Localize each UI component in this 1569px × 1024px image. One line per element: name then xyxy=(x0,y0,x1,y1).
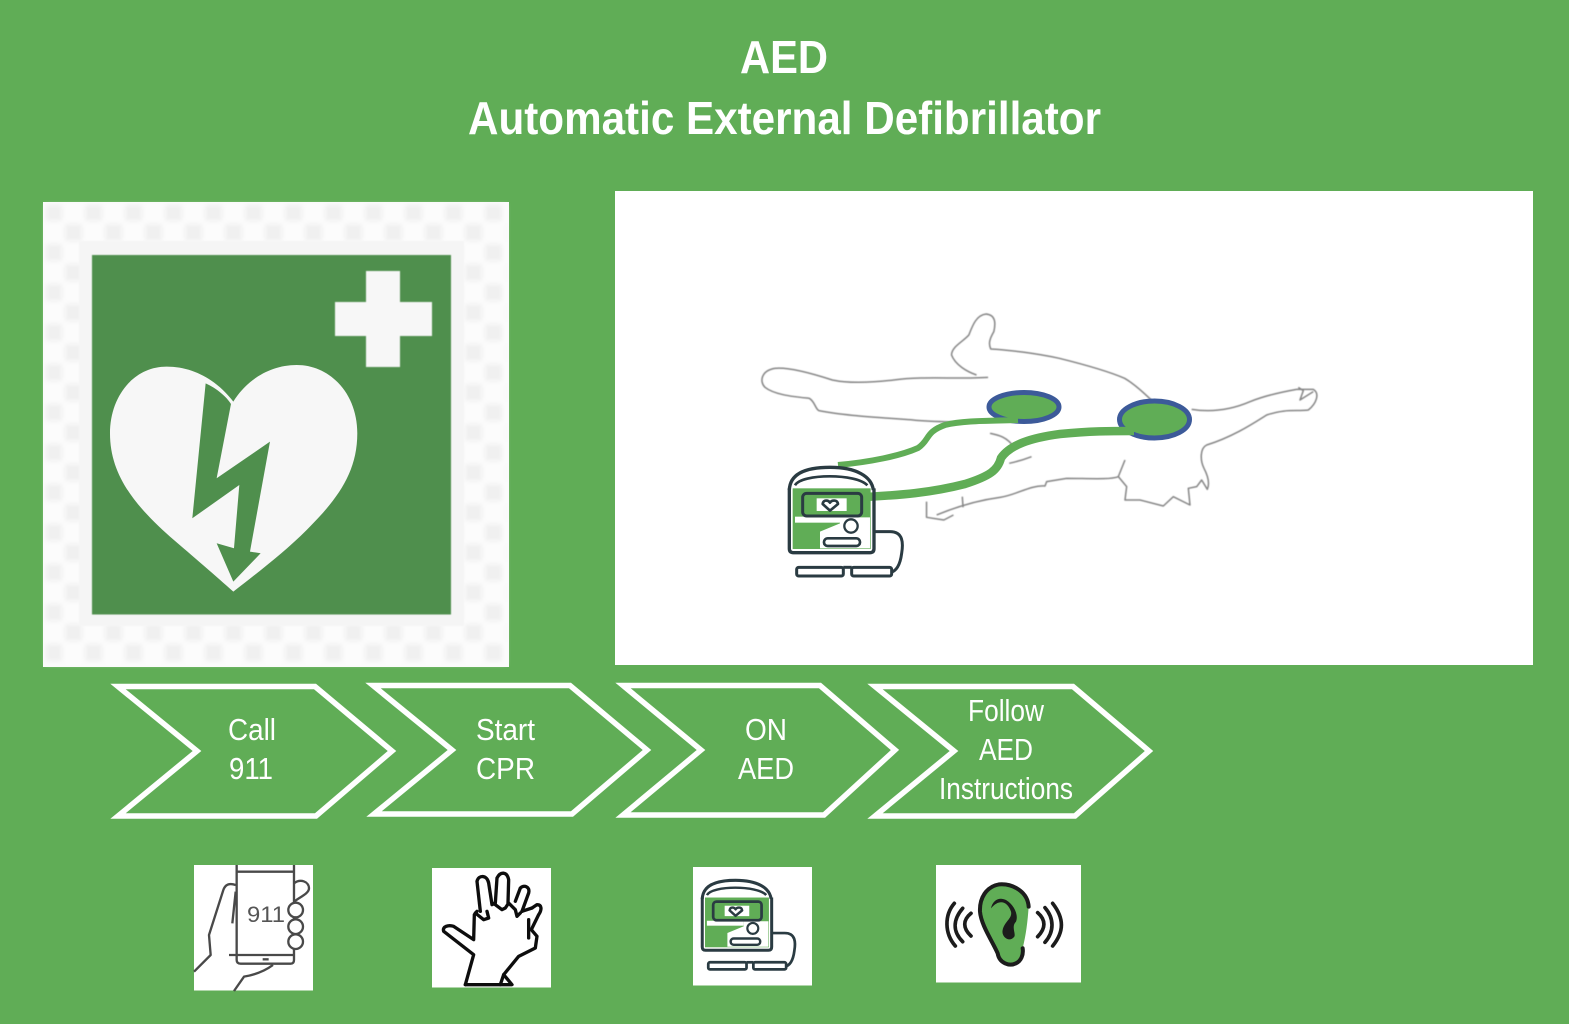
chevron: on AED xyxy=(623,686,895,815)
chevron: call 911: Call xyxy=(228,712,276,747)
cable: upper electrode wire xyxy=(838,420,1018,465)
icon tile: phone calling 911 xyxy=(194,865,313,991)
panel: AED safety sign xyxy=(43,202,509,667)
chevron: follow AED instructions: AED xyxy=(979,732,1033,767)
chevron: start CPR: Start xyxy=(476,712,535,747)
icon: heart with lightning bolt xyxy=(110,365,357,592)
icon tile: CPR hands xyxy=(432,868,551,988)
title: AED xyxy=(740,31,828,83)
chevron: follow AED instructions: Instructions xyxy=(939,771,1073,806)
electrode pad: lower xyxy=(1120,401,1190,438)
phone number text: 911 xyxy=(247,902,285,927)
chevron: follow AED instructions: Follow xyxy=(968,693,1045,728)
chevron: start CPR: CPR xyxy=(476,751,535,786)
body outline xyxy=(762,314,1317,520)
icon: AED device xyxy=(789,467,902,576)
title xyxy=(468,31,1101,144)
chevron: on AED: ON xyxy=(745,712,787,747)
icon tile: ear with sound waves xyxy=(936,865,1081,982)
title: Automatic External Defibrillator xyxy=(468,92,1101,144)
chevron: start CPR xyxy=(373,686,647,814)
panel: patient diagram xyxy=(615,191,1533,665)
electrode pad: upper xyxy=(989,392,1059,422)
cable: lower electrode wire xyxy=(866,431,1134,497)
step chevrons row xyxy=(118,686,1149,816)
chevron: call 911: 911 xyxy=(229,751,273,786)
chevron: call 911 xyxy=(118,686,392,816)
chevron: on AED: AED xyxy=(738,751,794,786)
icon: white cross xyxy=(335,271,432,367)
chevron: follow AED instructions xyxy=(875,686,1149,816)
icon tile: AED device xyxy=(693,867,812,986)
